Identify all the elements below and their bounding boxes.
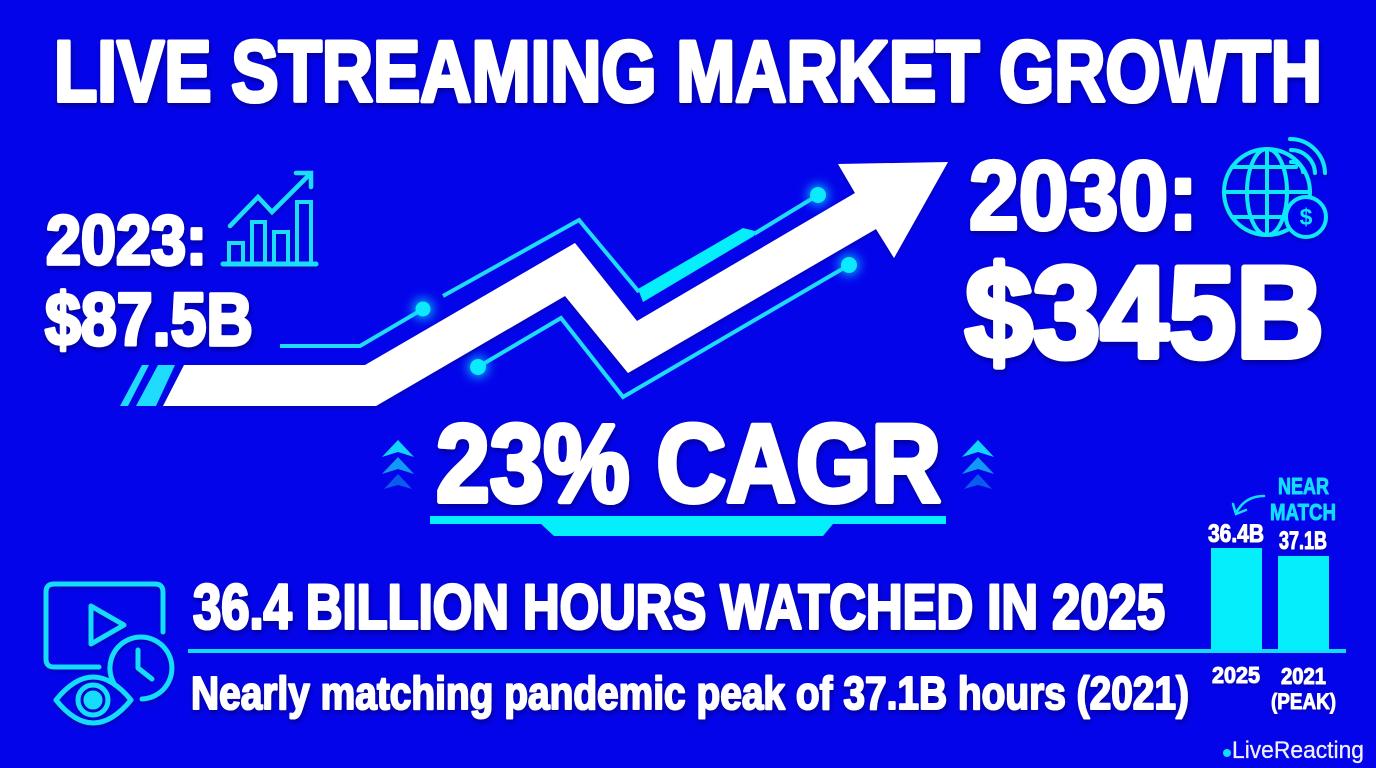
circuit line: upper with glow nodes — [280, 184, 829, 346]
divider axis — [188, 649, 1346, 653]
icon: globe with signal and dollar coin — [1224, 139, 1326, 237]
label: 2030: 2030: — [969, 141, 1198, 250]
bar: 2021 — [1278, 556, 1329, 650]
value: 36.4B: 36.4B — [1208, 520, 1264, 548]
value: $345B: $345B — [965, 239, 1324, 385]
icon: left chevrons — [382, 440, 414, 489]
panel: hours watched — [46, 572, 1346, 723]
label: near match: MATCH — [1270, 499, 1336, 525]
axis label: 2025: 2025 — [1212, 662, 1260, 688]
text: pandemic peak: Nearly matching pandemic peak of 37.1B hours (2021) — [191, 667, 1189, 719]
axis label: 2021 (peak): (PEAK) — [1271, 689, 1336, 714]
value: $87.5B: $87.5B — [45, 278, 253, 361]
panel: 2023 value — [45, 173, 316, 361]
arrow: near match — [1233, 496, 1264, 514]
bar: 2025 — [1211, 548, 1262, 650]
speed stripes — [120, 365, 175, 406]
callout: 23% CAGR — [382, 402, 994, 536]
main white arrow — [163, 162, 948, 406]
underline bar — [430, 516, 946, 536]
label: near match: NEAR — [1278, 473, 1329, 499]
label: 2023: 2023: — [46, 201, 207, 279]
circuit line: lower with glow nodes — [467, 254, 860, 397]
heading: 23% CAGR: 23% CAGR — [436, 402, 941, 526]
axis label: 2021 (peak) — [1271, 663, 1336, 714]
icon: right chevrons — [962, 440, 994, 489]
bar chart: 2025 vs 2021 — [1208, 473, 1336, 714]
chart: growth arrow with circuit lines — [120, 162, 948, 406]
heading: 36.4 billion hours: 36.4 BILLION HOURS WATCHED IN 2025 — [193, 572, 1165, 642]
label: near match — [1270, 473, 1336, 525]
icon: bar chart with rising arrow — [223, 173, 316, 264]
value: 37.1B: 37.1B — [1279, 527, 1327, 555]
icon: globe with signal and dollar coin: $ — [1300, 204, 1313, 230]
icon: video, clock and eye — [46, 584, 172, 723]
logo: LiveReacting: LiveReacting — [1232, 737, 1364, 764]
axis label: 2021 (peak): 2021 — [1281, 663, 1326, 689]
panel: 2030 value — [965, 139, 1326, 385]
